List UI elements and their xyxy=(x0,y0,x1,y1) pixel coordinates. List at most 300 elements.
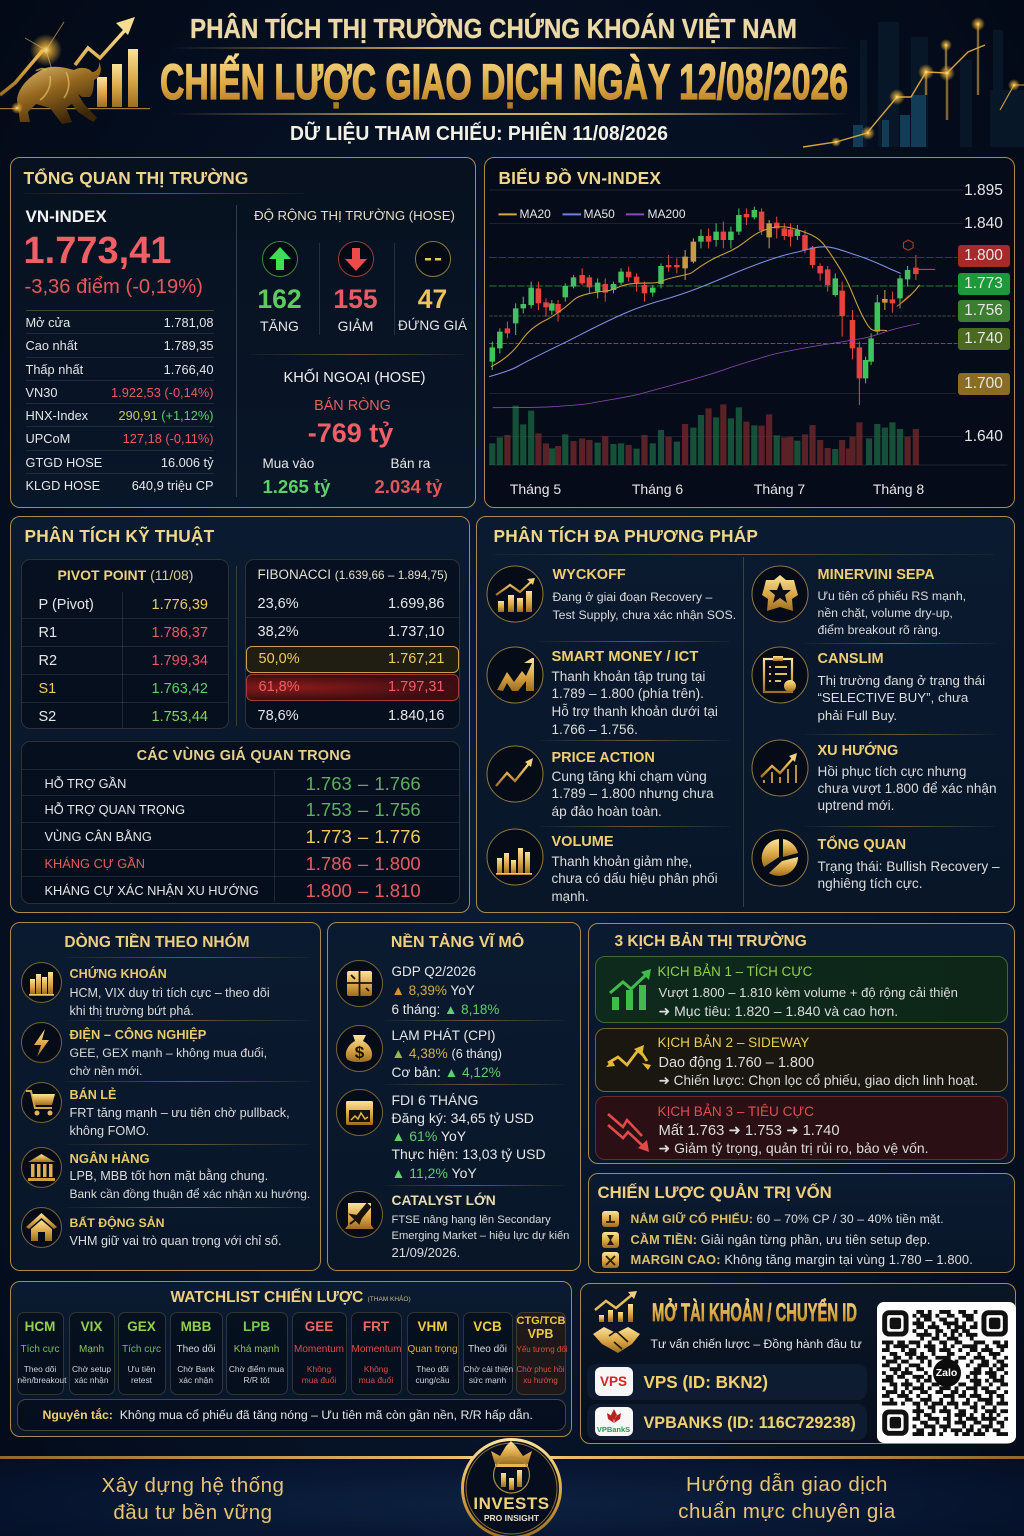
ticker cells: Momentum xyxy=(294,1344,344,1354)
highlight: 61.8 percent: 1.797,31 xyxy=(388,678,444,694)
icon: bank xyxy=(20,1146,62,1188)
title: FIBONACCI (1.639,66 – 1.894,75) xyxy=(258,566,448,582)
title: overline: PHÂN TÍCH THỊ TRƯỜNG CHỨNG KHOÁN VIỆT NAM xyxy=(190,13,797,44)
heading: TỔNG QUAN THỊ TRƯỜNG xyxy=(24,168,249,188)
market stats table: 1.789,35 xyxy=(164,338,214,353)
level: 1800 xyxy=(958,244,1010,266)
market stats table: 290,91 (+1,12%) xyxy=(119,408,214,423)
body: chờ nền mới. xyxy=(70,1064,142,1078)
heading: BÁN LẺ xyxy=(70,1088,116,1102)
red candles xyxy=(507,208,935,404)
body: Đang ở giai đoạn Recovery – xyxy=(552,590,712,604)
level: 1800: 1.800 xyxy=(964,246,1003,264)
heading: PHÂN TÍCH KỸ THUẬT xyxy=(24,526,214,546)
breadth: unchanged xyxy=(398,241,467,332)
body: phải Full Buy. xyxy=(818,708,897,723)
ticker cells: Tích cực xyxy=(122,1344,161,1354)
text: Đăng ký: 34,65 tỷ USD xyxy=(392,1110,534,1126)
icon: up chart xyxy=(606,964,656,1014)
caption: GIẢM xyxy=(338,318,373,334)
level: 1756: 1.756 xyxy=(964,302,1003,318)
body: Hỗ trợ thanh khoản dưới tại xyxy=(552,704,718,719)
pivot table: 1.763,42 xyxy=(152,680,208,696)
macro: catalyst xyxy=(336,1190,576,1262)
body: ➜ Mục tiêu: 1.820 – 1.840 và cao hơn. xyxy=(658,1003,898,1019)
heading: MINERVINI SEPA xyxy=(818,566,935,582)
broker id: VPS (ID: BKN2) xyxy=(644,1372,768,1392)
method: price action xyxy=(486,746,714,819)
footer slogan right: chuẩn mực chuyên gia xyxy=(678,1500,896,1522)
method: wyckoff xyxy=(486,566,736,622)
body: Dao động 1.760 – 1.800 xyxy=(658,1054,814,1070)
body: Ưu tiên cổ phiếu RS mạnh, xyxy=(818,588,966,602)
body xyxy=(818,858,1000,892)
text xyxy=(392,1026,566,1084)
icon xyxy=(602,1210,618,1226)
icon: zigzag arrow xyxy=(486,646,544,704)
pivot table xyxy=(20,558,228,728)
group: bán lẻ xyxy=(20,1082,316,1142)
fibonacci table: 78,6% xyxy=(258,708,299,724)
icon: checklist xyxy=(752,646,808,704)
key price zones: 1.753 – 1.756 xyxy=(306,798,421,820)
title: KỊCH BẢN 1 – TÍCH CỰC xyxy=(658,964,812,978)
heading: TỔNG QUAN xyxy=(818,836,906,852)
icon: money bag: $ xyxy=(354,1042,364,1062)
vn-index label: VN-INDEX xyxy=(26,206,107,226)
panel: biểu đồ vn-index xyxy=(484,157,1015,508)
icon: up arrow xyxy=(262,241,298,277)
icon xyxy=(602,1232,618,1248)
ticker cells: LPB xyxy=(243,1318,270,1334)
fibonacci table: 1.840,16 xyxy=(388,708,444,724)
panel: chiến lược quản trị vốn xyxy=(588,1173,1015,1273)
icon: sideway xyxy=(604,1038,654,1078)
ticker cells: Chờ Bank xác nhận xyxy=(177,1364,215,1385)
heading: ĐIỆN – CÔNG NGHIỆP xyxy=(70,1027,206,1042)
macro: gdp xyxy=(336,960,570,1018)
text: FDI 6 THÁNG xyxy=(392,1092,478,1108)
ticker cells: Theo dõi nền/breakout xyxy=(18,1364,66,1385)
ticker cells: Theo dõi xyxy=(468,1344,507,1354)
icon: down arrow xyxy=(338,241,374,277)
heading: CHIẾN LƯỢC QUẢN TRỊ VỐN xyxy=(598,1182,832,1202)
strategy: holding xyxy=(602,1208,1002,1228)
legend: MA50 xyxy=(584,206,615,220)
heading: SMART MONEY / ICT xyxy=(552,648,698,664)
ticker cells: Ưu tiên retest xyxy=(128,1364,155,1385)
text: 6 tháng: ▲ 8,18% xyxy=(392,1002,499,1016)
scenario 3 xyxy=(594,1096,1008,1160)
title: KỊCH BẢN 3 – TIÊU CỰC xyxy=(658,1104,814,1118)
body: 1.789 – 1.800 (phía trên). xyxy=(552,686,704,701)
icon: pie chart xyxy=(750,828,808,886)
logo: vpbanks: VPBankS xyxy=(597,1424,630,1434)
panel: phân tích kỹ thuật xyxy=(10,516,470,913)
method: xu hướng xyxy=(752,740,997,813)
heading: NGÂN HÀNG xyxy=(70,1150,150,1166)
body xyxy=(70,1044,267,1080)
body: Vượt 1.800 – 1.810 kèm volume + độ rộng cải thiện xyxy=(658,984,958,1000)
key price zones: KHÁNG CỰ XÁC NHẬN XU HƯỚNG xyxy=(44,882,259,898)
market stats table xyxy=(26,310,214,499)
panel: biểu đồ vn-index: 1.640 xyxy=(964,428,1003,444)
month axis: Tháng 7 xyxy=(754,480,805,496)
body xyxy=(818,672,985,723)
logo: vpbanks xyxy=(594,1406,632,1436)
ticker cells: Tích cực xyxy=(21,1344,59,1354)
count: 47 xyxy=(418,284,447,314)
body: 21/09/2026. xyxy=(392,1244,460,1260)
tan candles xyxy=(685,220,884,310)
legend: MA200 xyxy=(648,206,686,220)
heading: market breadth: ĐỘ RỘNG THỊ TRƯỜNG (HOSE) xyxy=(254,208,455,222)
scenario 2 xyxy=(594,1028,1008,1092)
net sell value: -769 tỷ xyxy=(308,418,393,448)
body: HCM, VIX duy trì tích cực – theo dõi xyxy=(70,986,270,1000)
text: Cơ bản: ▲ 4,12% xyxy=(392,1065,501,1080)
key price zones: HỖ TRỢ QUAN TRỌNG xyxy=(44,802,185,816)
icon: line up xyxy=(486,746,544,802)
ticker cells: GEE xyxy=(305,1318,333,1334)
body xyxy=(70,984,270,1020)
month axis: Tháng 5 xyxy=(510,480,561,496)
title: CÁC VÙNG GIÁ QUAN TRỌNG xyxy=(137,748,351,764)
group: chứng khoán xyxy=(20,962,316,1022)
key price zones: HỖ TRỢ GẦN xyxy=(44,776,126,790)
heading: NỀN TẢNG VĨ MÔ xyxy=(391,934,524,950)
icon: chart and handshake xyxy=(592,1290,642,1358)
brand name: INVESTS xyxy=(473,1494,550,1513)
icon: down chart xyxy=(604,1104,654,1154)
key price zones: 1.786 – 1.800 xyxy=(306,852,421,874)
icon xyxy=(602,1252,618,1268)
ticker cells: Chờ setup xác nhận xyxy=(72,1364,111,1385)
body: Mất 1.763 ➜ 1.753 ➜ 1.740 xyxy=(658,1122,840,1138)
level: 1700: 1.700 xyxy=(964,374,1003,392)
body: không FOMO. xyxy=(70,1124,149,1138)
zalo badge xyxy=(932,1358,960,1386)
text: ▲ 61% YoY xyxy=(392,1128,466,1144)
body: GEE, GEX mạnh – không mua đuổi, xyxy=(70,1046,267,1060)
body: VHM giữ vai trò quan trọng với chỉ số. xyxy=(70,1234,281,1248)
vn-index change: -3,36 điểm (-0,19%) xyxy=(24,276,203,298)
icon: house xyxy=(20,1206,62,1248)
ticker cells: Khá mạnh xyxy=(234,1344,279,1354)
key price zones: 1.800 – 1.810 xyxy=(306,880,421,900)
logo: vps: VPS xyxy=(600,1374,627,1388)
text: ▲ 8,39% YoY xyxy=(392,982,475,998)
market stats table: 127,18 (-0,11%) xyxy=(123,431,214,446)
heading: BIỂU ĐỒ VN-INDEX xyxy=(498,168,661,188)
ticker cells: Mạnh xyxy=(79,1344,104,1354)
green candles xyxy=(492,206,907,383)
title: KỊCH BẢN 2 – SIDEWAY xyxy=(658,1034,809,1050)
icon: catalyst xyxy=(336,1190,382,1238)
buy: Mua vào xyxy=(262,456,314,471)
body: ➜ Chiến lược: Chọn lọc cổ phiếu, giao dịch linh hoạt. xyxy=(658,1073,978,1088)
market stats table: UPCoM xyxy=(26,431,70,446)
body xyxy=(392,1212,572,1262)
qr code xyxy=(876,1302,1016,1442)
body: nghiêng tích cực. xyxy=(818,876,923,891)
pivot table: 1.799,34 xyxy=(152,652,208,668)
candlestick chart xyxy=(489,190,1008,466)
pivot table: 1.753,44 xyxy=(152,708,208,724)
panel: watchlist chiến lược xyxy=(10,1281,572,1437)
vn-index value: 1.773,41 xyxy=(24,230,171,272)
key price zones: 1.763 – 1.766 xyxy=(306,772,421,794)
market stats table: KLGD HOSE xyxy=(26,478,100,493)
heading: CANSLIM xyxy=(818,650,884,666)
fibonacci table: 23,6% xyxy=(258,596,299,612)
market stats table: Thấp nhất xyxy=(26,362,83,377)
ticker cells: Chờ cải thiện sức mạnh xyxy=(464,1364,513,1385)
body: FRT tăng mạnh – ưu tiên chờ pullback, xyxy=(70,1106,290,1120)
footer slogan left xyxy=(58,1472,328,1532)
market stats table: GTGD HOSE xyxy=(26,455,102,470)
text: Thực hiện: 13,03 tỷ USD xyxy=(392,1146,546,1162)
body: Thanh khoản tập trung tại xyxy=(552,668,705,684)
body xyxy=(658,1122,929,1157)
ticker cells: GEX xyxy=(127,1318,156,1334)
macro: fdi xyxy=(336,1088,570,1184)
subtitle: DỮ LIỆU THAM CHIẾU: PHIÊN 11/08/2026 xyxy=(290,121,668,145)
icon: uptrend xyxy=(752,740,808,796)
body: chưa có dấu hiệu phân phối xyxy=(552,871,718,886)
body xyxy=(552,768,714,819)
body xyxy=(818,588,966,637)
ticker cells: VPB xyxy=(528,1326,553,1340)
caption: ĐỨNG GIÁ xyxy=(398,318,467,332)
method: canslim xyxy=(752,646,985,723)
body: 1.766 – 1.756. xyxy=(552,722,638,737)
pivot table: R1 xyxy=(38,624,57,640)
legend xyxy=(520,206,686,220)
scenario 1 xyxy=(594,956,1008,1022)
body: “SELECTIVE BUY”, chưa xyxy=(818,690,968,705)
logo: invests pro insight xyxy=(461,1438,562,1536)
broker: vps xyxy=(586,1364,866,1400)
ticker cells: Không mua đuổi xyxy=(302,1364,336,1385)
heading: WATCHLIST CHIẾN LƯỢC (THAM KHẢO) xyxy=(170,1288,411,1306)
level: 1740 xyxy=(958,328,1010,350)
footer slogan right: Hướng dẫn giao dịch xyxy=(686,1473,888,1496)
fibonacci table: 38,2% xyxy=(258,624,299,640)
principle bar: Nguyên tắc: Không mua cổ phiếu đã tăng nóng – Ưu tiên mã còn gần nền, R/R hấp dẫn. xyxy=(42,1408,533,1422)
strategy: caution xyxy=(602,1230,1002,1250)
body: LPB, MBB tốt hơn mặt bằng chung. xyxy=(70,1169,268,1183)
heading: KHỐI NGOẠI (HOSE) xyxy=(284,370,425,386)
body: điểm breakout rõ ràng. xyxy=(818,623,941,637)
heading: CHỨNG KHOÁN xyxy=(70,967,167,981)
pivot table: P (Pivot) xyxy=(38,596,94,612)
level: 1773: 1.773 xyxy=(964,274,1003,292)
heading: PRICE ACTION xyxy=(552,750,655,766)
ticker cells: Theo dõi xyxy=(177,1344,215,1354)
principle bar xyxy=(16,1398,566,1430)
axis labels: 1.895 xyxy=(964,182,1003,198)
key price zones: 1.773 – 1.776 xyxy=(306,826,421,846)
body xyxy=(552,854,718,904)
foreign flow: 1.265 tỷ xyxy=(262,476,330,497)
ticker cells: VHM xyxy=(418,1318,448,1334)
footer slogan left: đầu tư bền vững xyxy=(113,1501,273,1524)
panel: mở tài khoản xyxy=(580,1283,1016,1444)
body: uptrend mới. xyxy=(818,798,894,813)
icon: golden bull with rising chart xyxy=(0,17,150,124)
strategy: margin xyxy=(602,1250,1002,1270)
highlight: 50 percent: 50,0% xyxy=(258,650,300,666)
method: tổng quan xyxy=(752,830,1000,891)
body: nền chặt, volume dry-up, xyxy=(818,606,953,620)
text: CẦM TIỀN: Giải ngân từng phần, ưu tiên setup đẹp. xyxy=(630,1232,931,1246)
ticker cells xyxy=(16,1312,566,1394)
ticker cells: FRT xyxy=(363,1318,389,1334)
ticker cells: Momentum xyxy=(352,1344,402,1354)
net sell label: BÁN RÒNG xyxy=(314,398,391,414)
body: 1.789 – 1.800 nhưng chưa xyxy=(552,786,714,801)
header banner xyxy=(0,12,1024,148)
icon: bars with arrow xyxy=(486,566,544,622)
ticker cells: HCM xyxy=(25,1318,55,1334)
month axis: Tháng 8 xyxy=(873,480,924,496)
market stats table: 1.766,40 xyxy=(164,362,214,377)
title: PIVOT POINT (11/08) xyxy=(58,566,193,582)
text: GDP Q2/2026 xyxy=(392,964,476,978)
group: bất động sản xyxy=(20,1206,316,1252)
panel: phân tích đa phương pháp xyxy=(476,516,1015,913)
broker id: VPBANKS (ID: 116C729238) xyxy=(644,1414,856,1432)
heading: XU HƯỚNG xyxy=(818,742,898,758)
highlight: 50 percent xyxy=(246,646,458,672)
body: FTSE nâng hạng lên Secondary xyxy=(392,1214,551,1226)
market stats table: 640,9 triệu CP xyxy=(132,478,214,493)
market stats table: 1.781,08 xyxy=(164,315,214,330)
level: 1740: 1.740 xyxy=(964,330,1003,346)
icon: flat xyxy=(415,241,451,277)
heading: CATALYST LỚN xyxy=(392,1192,496,1208)
market stats table: VN30 xyxy=(26,385,58,400)
skyline with glowing line xyxy=(802,17,1024,148)
heading: WYCKOFF xyxy=(552,566,626,582)
body xyxy=(552,590,736,622)
highlight: 50 percent: 1.767,21 xyxy=(388,650,444,666)
panel: nền tảng vĩ mô xyxy=(327,922,581,1271)
group: ngân hàng xyxy=(20,1146,316,1206)
text: NẮM GIỮ CỔ PHIẾU: 60 – 70% CP / 30 – 40% tiền mặt. xyxy=(630,1212,944,1226)
legend swatches xyxy=(498,211,644,217)
highlight: 61.8 percent xyxy=(246,674,458,700)
fibonacci table xyxy=(244,558,460,728)
ticker cells: Yếu tương đối xyxy=(516,1344,568,1354)
pivot table: 1.786,37 xyxy=(152,624,208,640)
text xyxy=(392,962,566,1020)
method: volume xyxy=(486,828,718,904)
count: 155 xyxy=(333,284,378,314)
method: smart money xyxy=(486,646,718,737)
pivot table: 1.776,39 xyxy=(152,596,208,612)
subheading: Tư vấn chiến lược – Đồng hành đầu tư xyxy=(650,1336,862,1350)
icon: star badge xyxy=(752,566,808,622)
foreign flow xyxy=(262,368,442,497)
caption: TĂNG xyxy=(260,318,299,334)
level: 1773 xyxy=(958,272,1010,294)
icon: cart xyxy=(20,1082,62,1122)
text: ▲ 11,2% YoY xyxy=(392,1165,477,1181)
body: Test Supply, chưa xác nhận SOS. xyxy=(552,608,736,622)
ticker cells: Quan trọng xyxy=(408,1344,458,1354)
month axis xyxy=(510,480,924,497)
panel: 3 kịch bản thị trường xyxy=(588,923,1015,1164)
grid lines and levels xyxy=(489,190,1007,464)
breadth: declining xyxy=(333,241,378,334)
body: Bank cần đồng thuận để xác nhận xu hướng. xyxy=(70,1186,310,1200)
icon: buildings xyxy=(20,962,62,1002)
method: minervini sepa xyxy=(752,566,966,637)
body: khi thị trường bứt phá. xyxy=(70,1004,194,1018)
ticker cells: Không mua đuổi xyxy=(359,1364,393,1385)
body: Thanh khoản giảm nhẹ, xyxy=(552,854,692,868)
fibonacci table: 1.737,10 xyxy=(388,624,444,640)
ticker cells: Chờ phục hồi xu hướng xyxy=(517,1364,564,1385)
ticker cells: MBB xyxy=(181,1318,211,1334)
body: Emerging Market – hiệu lực dự kiến xyxy=(392,1230,569,1242)
heading: VOLUME xyxy=(552,834,614,850)
heading: DÒNG TIỀN THEO NHÓM xyxy=(64,934,250,950)
key price zones: KHÁNG CỰ GẦN xyxy=(44,856,145,870)
body xyxy=(70,1104,290,1140)
breadth: advancing xyxy=(257,241,302,334)
body xyxy=(818,764,997,813)
ticker cells: VIX xyxy=(81,1318,102,1334)
fibonacci table: 1.699,86 xyxy=(388,596,444,612)
text: LẠM PHÁT (CPI) xyxy=(392,1028,495,1042)
logo: vps xyxy=(594,1366,632,1396)
heading: PHÂN TÍCH ĐA PHƯƠNG PHÁP xyxy=(494,526,758,546)
market stats table: 1.922,53 (-0,14%) xyxy=(111,385,214,400)
panel: biểu đồ vn-index: 1.840 xyxy=(964,214,1003,232)
icon: volume bars xyxy=(486,828,544,886)
body xyxy=(658,1054,978,1089)
market stats table: 16.006 tỷ xyxy=(161,455,214,470)
body xyxy=(658,984,958,1022)
level: 1756 xyxy=(958,300,1010,322)
market stats table: Cao nhất xyxy=(26,338,77,353)
text: MARGIN CAO: Không tăng margin tại vùng 1.780 – 1.800. xyxy=(630,1252,973,1266)
body: chưa vượt 1.800 để xác nhận xyxy=(818,781,997,796)
body: Hồi phục tích cực nhưng xyxy=(818,764,966,778)
ticker cells: Theo dõi cung/cầu xyxy=(416,1364,450,1385)
key price zones: VÙNG CÂN BẰNG xyxy=(44,828,152,844)
text: ▲ 4,38% (6 tháng) xyxy=(392,1046,502,1061)
month axis: Tháng 6 xyxy=(632,480,683,496)
text xyxy=(392,1090,566,1182)
body xyxy=(552,668,718,737)
market stats table: Mở cửa xyxy=(26,315,70,330)
group: điện công nghiệp xyxy=(20,1022,316,1082)
icon: fdi xyxy=(336,1088,382,1136)
icon: bolt xyxy=(20,1022,62,1062)
brand tagline: PRO INSIGHT xyxy=(484,1513,539,1523)
market stats table: HNX-Index xyxy=(26,408,88,423)
body: Trạng thái: Bullish Recovery – xyxy=(818,858,1000,874)
footer slogan right xyxy=(640,1472,934,1532)
highlight: 61.8 percent: 61,8% xyxy=(258,678,300,694)
ticker cells: Chờ điểm mua R/R tốt xyxy=(229,1364,284,1385)
panel: dòng tiền theo nhóm xyxy=(10,922,321,1271)
body: Cung tăng khi chạm vùng xyxy=(552,768,707,784)
